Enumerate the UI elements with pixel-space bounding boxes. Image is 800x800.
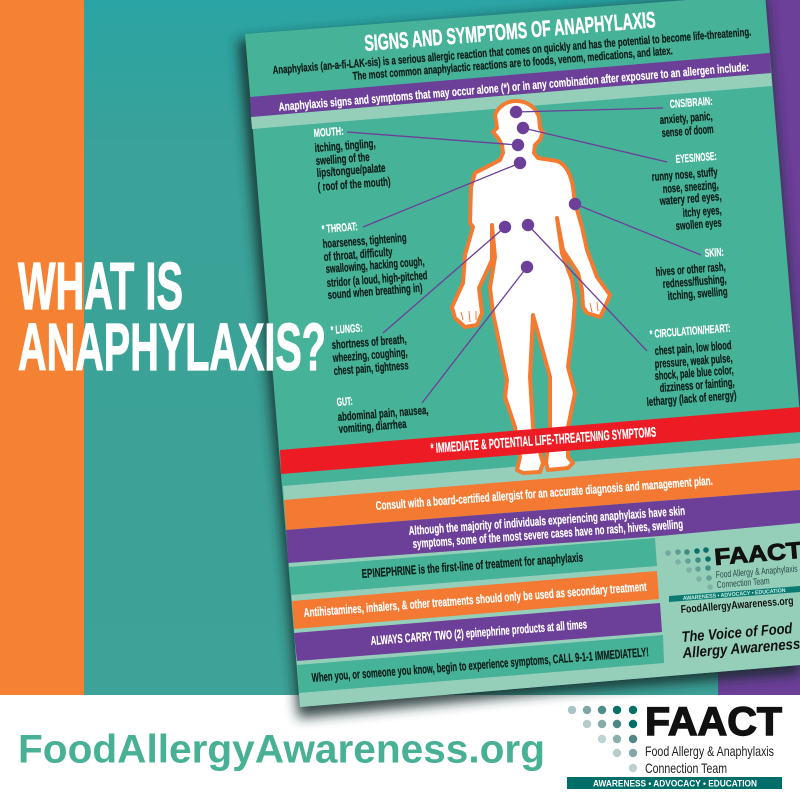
label: skin: hives or other rash, [655, 260, 726, 279]
label: mouth: itching, tingling, [314, 136, 376, 155]
label: eyes/nose: EYES/NOSE: [675, 151, 717, 166]
headline [18, 249, 326, 385]
poster logo: Connection Team [716, 576, 770, 591]
label: circulation/heart: * CIRCULATION/HEART: [649, 323, 731, 341]
label: throat: swallowing, hacking cough, [325, 254, 425, 276]
poster logo dots [665, 547, 713, 590]
label: skin: itching, swelling [667, 284, 728, 303]
purple band: skin symptoms note [286, 490, 800, 563]
label: circulation/heart: lethargy (lack of energy) [646, 388, 737, 409]
label: throat: sound when breathing in) [327, 281, 423, 302]
label: skin: redness/flushing, [662, 272, 727, 291]
label: lungs: * LUNGS: [330, 323, 363, 337]
label: gut: abdominal pain, nausea, [337, 403, 429, 424]
label: skin: SKIN: [704, 247, 724, 260]
label: circulation/heart: chest pain, low blood [654, 338, 732, 358]
poster background [245, 0, 800, 707]
logo dots [568, 706, 637, 772]
label: throat: stridor (a loud, high-pitched [326, 268, 428, 290]
light lower panel [283, 443, 800, 707]
row: always carry two [294, 603, 662, 661]
poster logo [665, 537, 800, 662]
label: CNS/brain [659, 96, 714, 140]
label: lungs: chest pain, tightness [333, 358, 409, 378]
panel: poster [245, 0, 800, 707]
symptom markers [499, 106, 581, 273]
light band under heading [251, 73, 772, 129]
label: circulation/heart: dizziness or fainting, [659, 375, 735, 395]
background: orange strip [0, 0, 84, 695]
row: epinephrine [289, 538, 657, 595]
label: eyes/nose: itchy eyes, [682, 203, 722, 220]
label: eyes/nose [651, 151, 722, 233]
label: lungs: shortness of breath, [331, 332, 407, 352]
label: mouth: lips/tongue/palate [316, 161, 386, 180]
website url: FoodAllergyAwareness.org [18, 728, 545, 772]
body figure [452, 101, 610, 473]
label: CNS/brain: sense of doom [661, 122, 714, 140]
label: CNS/brain: CNS/BRAIN: [669, 96, 713, 111]
label: mouth: ( roof of the mouth) [317, 174, 391, 194]
headline: ANAPHYLAXIS? [18, 310, 326, 385]
label: eyes/nose: nose, sneezing, [662, 178, 719, 196]
label: lungs [330, 323, 409, 378]
red warning band [280, 407, 800, 474]
orange band: consult [284, 458, 800, 530]
background: white footer [0, 695, 800, 800]
label: mouth [313, 126, 391, 194]
label: throat [321, 221, 428, 302]
row: call 911 [297, 635, 664, 693]
row: epinephrine: EPINEPHRINE is the first-line of treatment for anaphylaxis [361, 550, 584, 581]
label: eyes/nose: swollen eyes [675, 215, 722, 233]
label: gut: GUT: [336, 396, 353, 409]
label: circulation/heart [646, 323, 737, 409]
label: circulation/heart: shock, pale blue color, [654, 363, 734, 383]
logo wordmark: FAACT [645, 700, 782, 744]
poster logo: AWARENESS • ADVOCACY • EDUCATION [683, 588, 786, 602]
label: eyes/nose: runny nose, stuffy [651, 165, 718, 184]
poster logo wordmark: FAACT [713, 537, 800, 570]
FAACT logo [567, 700, 782, 790]
label: gut [336, 396, 429, 436]
label: CNS/brain: anxiety, panic, [659, 109, 713, 127]
label: gut: vomiting, diarrhea [338, 417, 407, 436]
connector lines [347, 108, 701, 403]
row: antihistamines [292, 571, 659, 629]
label: throat: of throat, difficulty [323, 245, 393, 264]
poster intro text [272, 27, 752, 83]
label: mouth: swelling of the [315, 150, 370, 168]
FAACT logo: Connection Team [645, 760, 727, 776]
row: always carry two: ALWAYS CARRY TWO (2) epinephrine products at all times [370, 617, 588, 648]
label: lungs: wheezing, coughing, [332, 345, 408, 365]
label: throat: hoarseness, tightening [322, 230, 407, 251]
FAACT logo: AWARENESS • ADVOCACY • EDUCATION [593, 778, 757, 790]
label: throat: * THROAT: [321, 221, 358, 236]
headline: WHAT IS [18, 249, 183, 324]
background: purple panel [718, 0, 800, 695]
poster shadow [238, 0, 800, 718]
label: skin [655, 247, 728, 303]
label: mouth: MOUTH: [313, 126, 344, 140]
label: eyes/nose: watery red eyes, [658, 189, 722, 208]
background: teal panel [84, 0, 800, 695]
label: circulation/heart: pressure, weak pulse, [654, 351, 733, 371]
logo tagline bar [567, 777, 782, 789]
